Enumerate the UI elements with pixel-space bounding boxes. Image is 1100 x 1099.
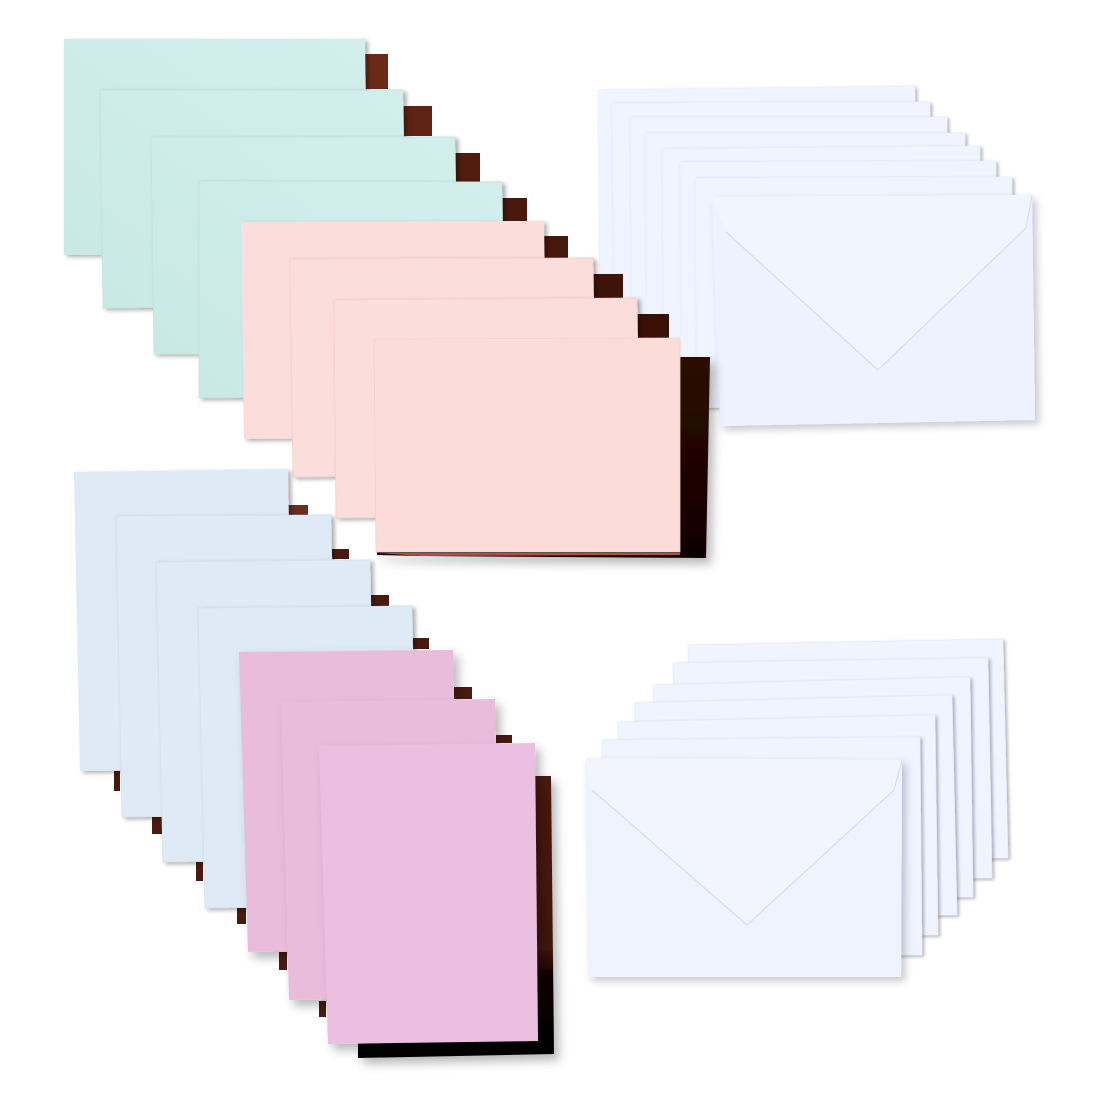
mint card 4 with foil edge: [199, 181, 527, 398]
pink card 3 with foil edge: [334, 298, 669, 518]
front envelope body: [585, 758, 902, 977]
portrait card stack: [74, 469, 554, 1058]
top right envelope stack: [598, 86, 1035, 426]
blue card 3: [156, 560, 375, 862]
back envelopes: [602, 639, 1008, 958]
lilac card 3 with foil back: [319, 743, 554, 1058]
mint card 2 with foil edge: [100, 90, 432, 308]
pink card 4 with foil back: [374, 338, 710, 558]
mint card 1 with foil edge: [64, 39, 388, 255]
front envelope flap: [585, 758, 902, 925]
pink card 2 with foil edge: [290, 258, 623, 477]
front envelope body: [712, 195, 1035, 426]
back envelopes: [598, 86, 1014, 408]
foil edge slivers: [114, 505, 512, 1017]
bottom right envelope stack: [585, 639, 1008, 977]
pink card 1 with foil edge: [241, 221, 568, 439]
blue card 1: [74, 469, 293, 771]
blue card 4: [198, 606, 417, 908]
blue card 2: [116, 515, 336, 817]
mint card 3 with foil edge: [151, 137, 480, 354]
landscape card stack: [64, 39, 710, 558]
front envelope flap: [712, 195, 1032, 370]
lilac card 2: [281, 699, 500, 1000]
lilac card 1: [239, 650, 458, 952]
